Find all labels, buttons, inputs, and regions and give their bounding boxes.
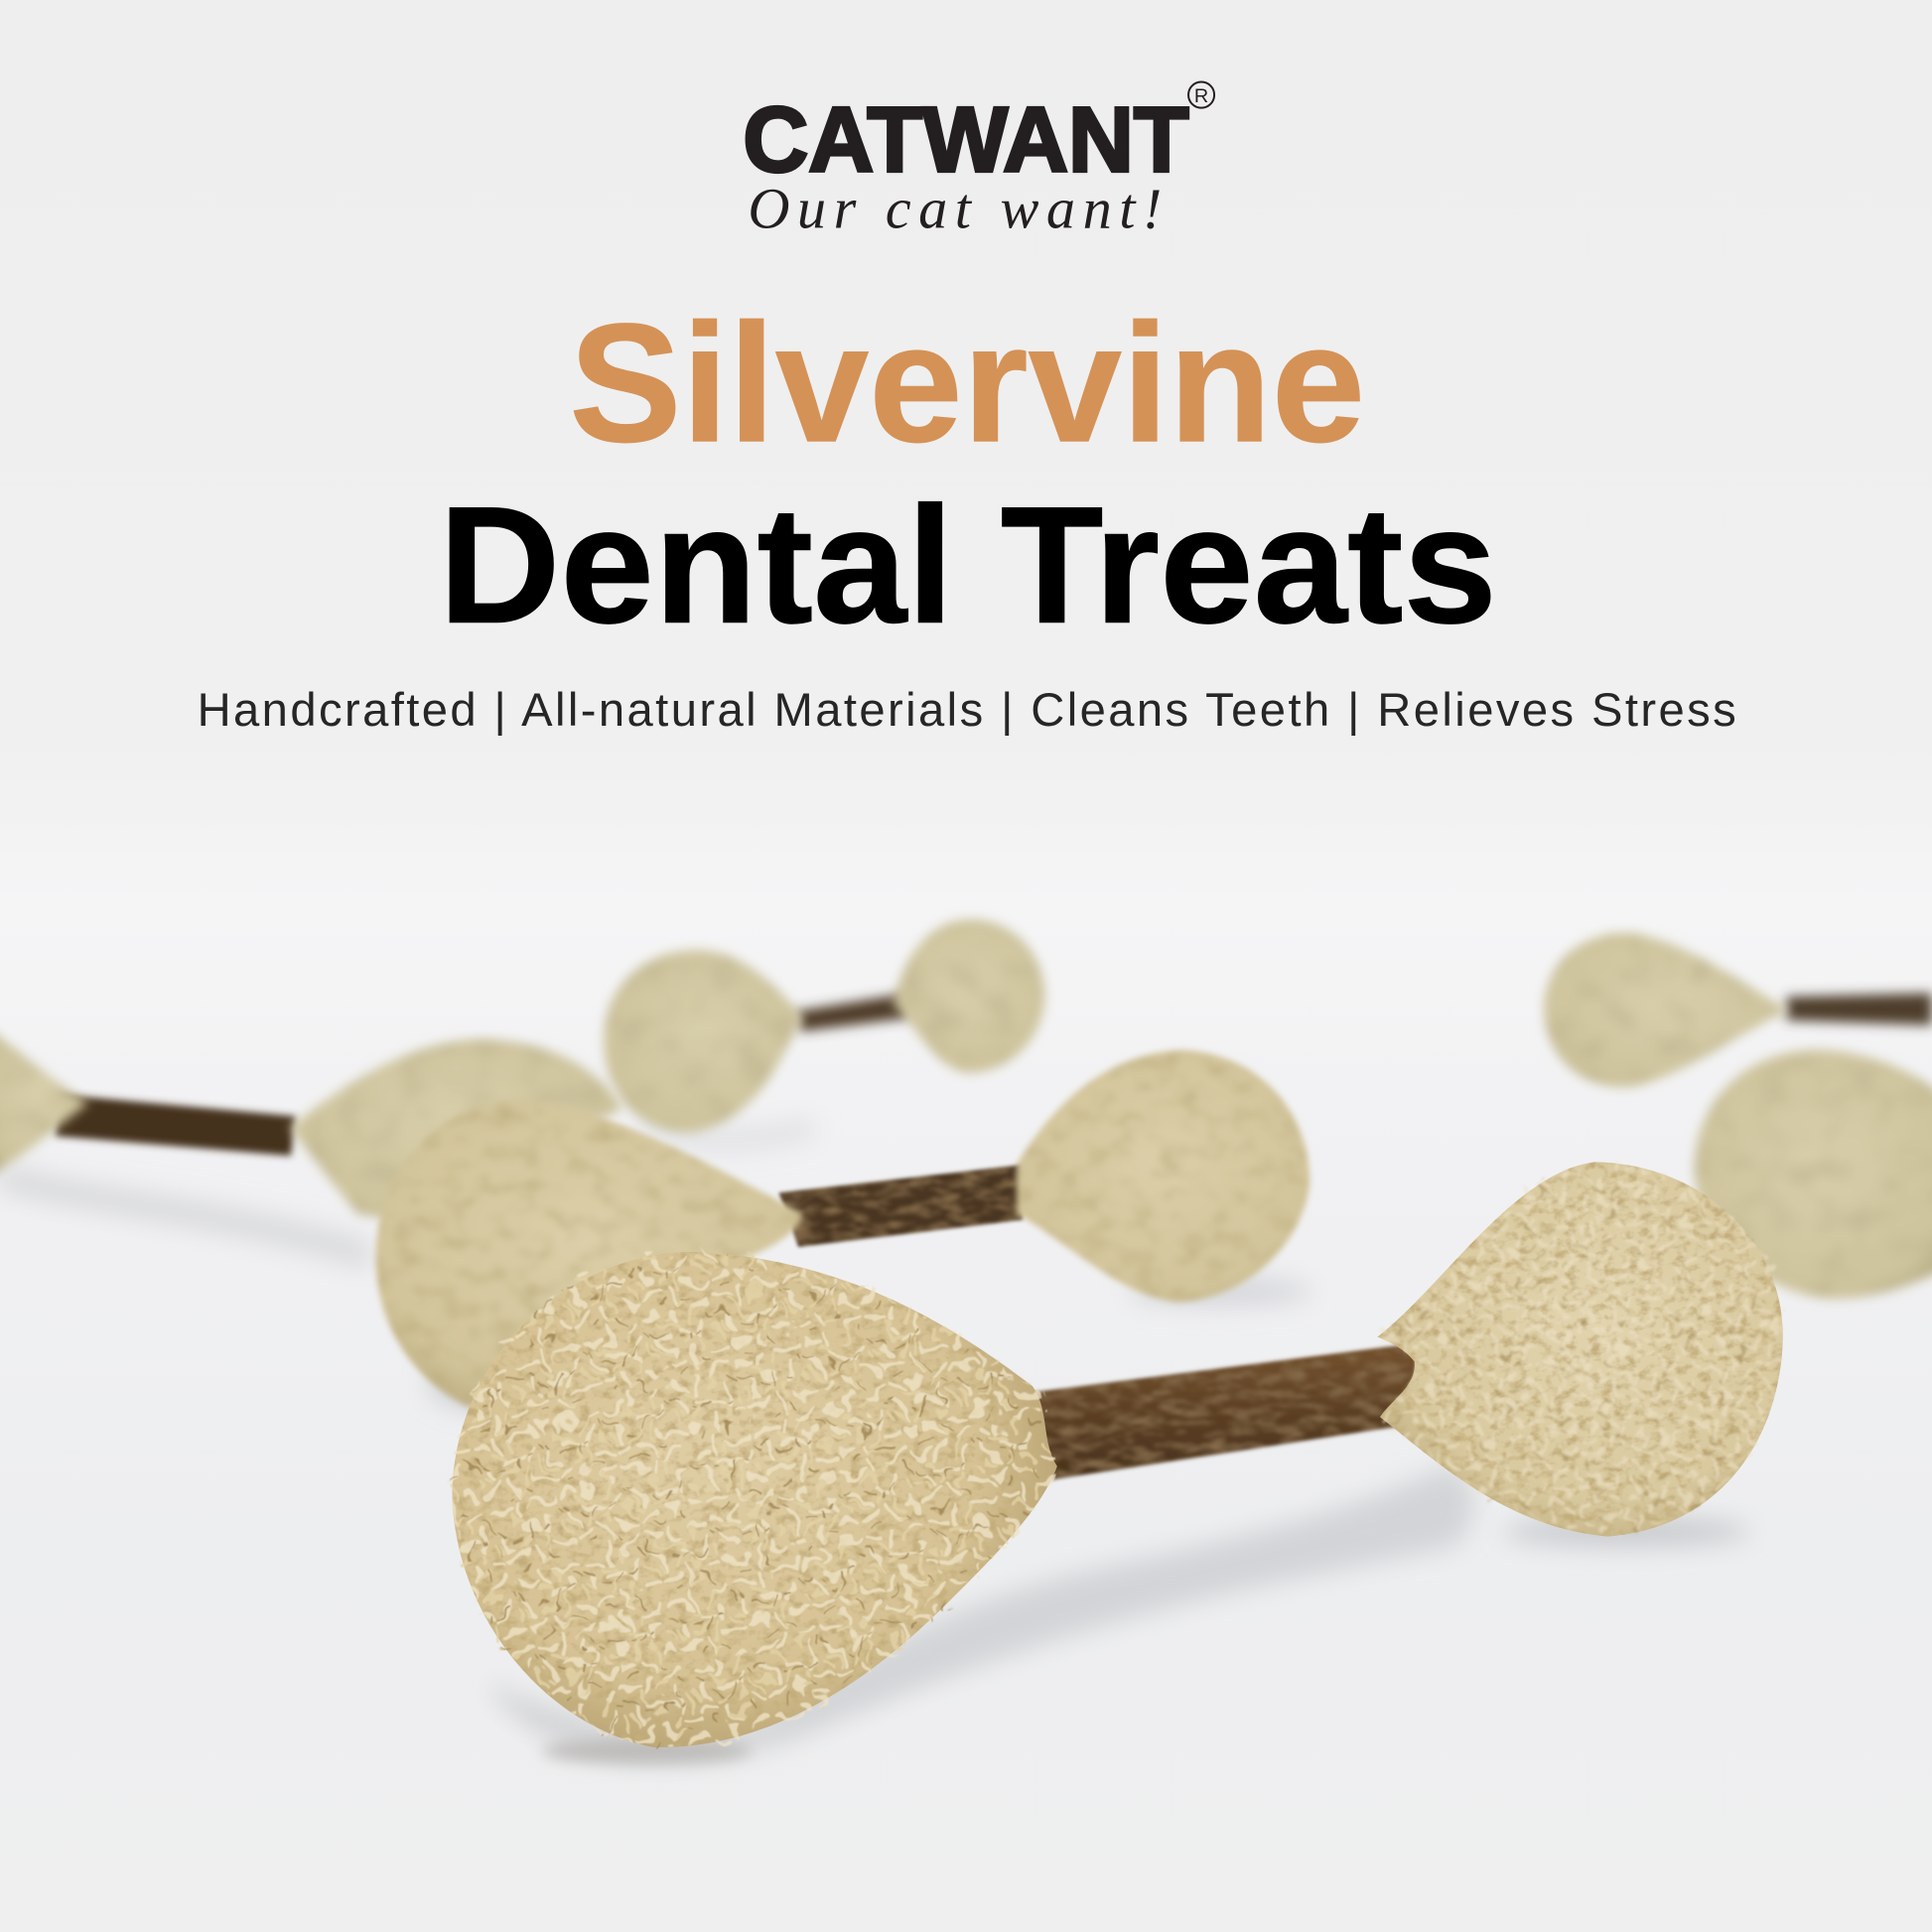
treat: top right, blurred — [1544, 932, 1932, 1299]
logo registered mark — [1188, 82, 1214, 108]
logo wordmark: CATWANT — [743, 88, 1189, 192]
logo registered mark: R — [1194, 85, 1208, 107]
logo tagline: Our cat want! — [748, 177, 1162, 241]
subtitle: product features: Handcrafted | All-natural Materials | Cleans Teeth | Relieves Stress — [198, 683, 1736, 736]
treat head: foreground right — [1378, 1162, 1783, 1537]
shadow: foreground treat — [486, 1466, 1749, 1763]
treat: middle, slightly blurred — [376, 1049, 1312, 1407]
treat: back left, blurred — [0, 1029, 622, 1257]
photo: silvervine dental treats — [0, 919, 1932, 1763]
treat: top centre, blurred — [604, 919, 1044, 1140]
logo: CATWANT — [743, 82, 1214, 241]
treat head: foreground left — [452, 1252, 1057, 1747]
title: Dental Treats: Dental Treats — [439, 472, 1497, 658]
title: Silvervine: Silvervine — [569, 289, 1365, 478]
stick: foreground — [1033, 1343, 1417, 1480]
